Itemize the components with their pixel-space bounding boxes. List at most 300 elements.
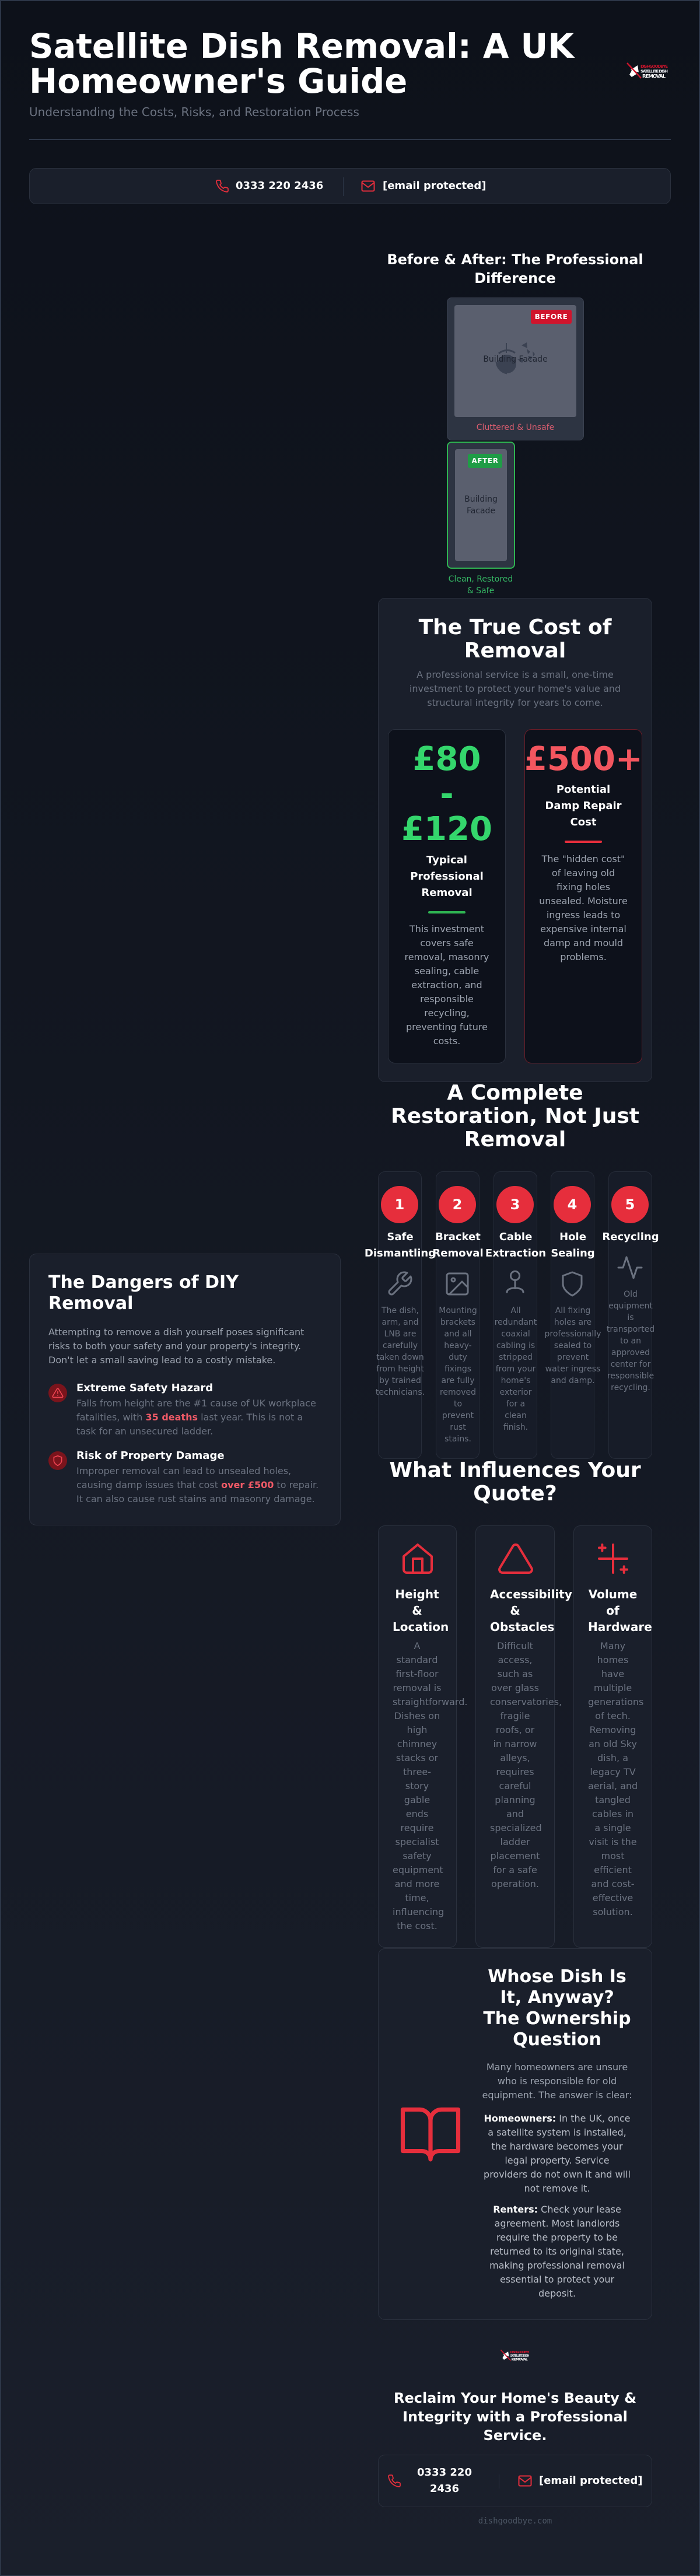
badge: after: AFTER bbox=[471, 457, 499, 465]
panel: dangers of DIY bbox=[29, 1254, 341, 1525]
logo: DISHGOODBYE bbox=[640, 64, 668, 69]
title bbox=[365, 1231, 436, 1259]
icon: cluttered dish bbox=[496, 342, 535, 374]
text: of tech. bbox=[595, 1710, 631, 1721]
label bbox=[464, 495, 498, 516]
description: taken down bbox=[376, 1353, 424, 1362]
body: recycling, bbox=[424, 1007, 470, 1019]
text: tangled bbox=[595, 1794, 631, 1805]
body: preventing future bbox=[406, 1021, 488, 1032]
text: and bbox=[506, 1808, 524, 1819]
description: brackets bbox=[440, 1318, 475, 1327]
title: Recycling bbox=[602, 1231, 659, 1243]
title bbox=[490, 1586, 540, 1635]
homeowners text bbox=[440, 2112, 674, 2196]
item text: It can also cause rust stains and masonry damage. bbox=[76, 1493, 315, 1504]
call to action heading: Integrity with a Professional bbox=[402, 2409, 628, 2425]
description: technicians. bbox=[376, 1388, 425, 1397]
text: for a safe bbox=[493, 1864, 537, 1875]
text: safety bbox=[402, 1850, 432, 1861]
number: 4 bbox=[568, 1196, 577, 1213]
homeowners text: legal property. Service bbox=[505, 2155, 610, 2166]
renters text: agreement. Most landlords bbox=[495, 2218, 620, 2229]
text: and cost- bbox=[591, 1878, 635, 1889]
homeowners text: a satellite system is installed, bbox=[488, 2127, 626, 2138]
description: investment to protect your home's value and bbox=[410, 683, 621, 694]
text: high bbox=[407, 1724, 427, 1735]
footer contact bar bbox=[378, 2455, 652, 2507]
icon: warning bbox=[48, 1384, 67, 1402]
description: clean bbox=[505, 1411, 527, 1420]
subtitle: Understanding the Costs, Risks, and Restoration Process bbox=[29, 105, 359, 119]
text: specialized bbox=[490, 1822, 542, 1833]
heading bbox=[440, 1966, 674, 2050]
icon: sparkle plus bbox=[594, 1540, 632, 1577]
label bbox=[545, 783, 622, 828]
renters text bbox=[440, 2203, 674, 2301]
title: & bbox=[412, 1604, 422, 1618]
title: Obstacles bbox=[490, 1620, 554, 1634]
description: Mounting bbox=[439, 1306, 477, 1315]
number bbox=[611, 1186, 649, 1223]
text: require bbox=[401, 1822, 433, 1833]
description: center for bbox=[611, 1360, 650, 1369]
body: fixing holes bbox=[556, 881, 610, 892]
heading: quote factors: What Influences Your bbox=[389, 1458, 641, 1482]
description: from height bbox=[376, 1364, 424, 1374]
description: from your bbox=[496, 1364, 536, 1374]
description: by trained bbox=[379, 1376, 421, 1385]
intro text: Many homeowners are unsure bbox=[487, 2062, 628, 2073]
text: gable bbox=[404, 1794, 430, 1805]
icon: phone bbox=[216, 180, 229, 192]
text: aerial, and bbox=[588, 1780, 638, 1791]
text: have bbox=[601, 1668, 624, 1679]
body: extraction, and bbox=[411, 979, 482, 991]
badge: after bbox=[468, 454, 502, 468]
title: of bbox=[606, 1604, 620, 1618]
icon: mail bbox=[362, 181, 374, 191]
description: duty bbox=[449, 1353, 467, 1362]
title: & bbox=[510, 1604, 520, 1618]
step 3 bbox=[494, 1171, 537, 1459]
item text bbox=[76, 1398, 316, 1437]
description: and all bbox=[444, 1329, 472, 1339]
heading: Removal bbox=[464, 639, 566, 663]
renters text: require the property to be bbox=[496, 2232, 618, 2243]
body: damp and mould bbox=[544, 937, 623, 949]
description: heavy- bbox=[444, 1341, 472, 1350]
description: is bbox=[627, 1313, 634, 1322]
icon: mail bbox=[518, 2475, 532, 2487]
description: Don't let a small saving lead to a costly mistake. bbox=[48, 1354, 275, 1366]
text: over glass bbox=[491, 1682, 539, 1693]
text: planning bbox=[495, 1794, 536, 1805]
icon: wrench bbox=[388, 1272, 412, 1295]
intro text: who is responsible for old bbox=[498, 2076, 617, 2087]
body bbox=[404, 923, 489, 1046]
description bbox=[376, 1306, 425, 1397]
description: stripped bbox=[499, 1353, 533, 1362]
title: Safe bbox=[387, 1231, 414, 1243]
item text bbox=[76, 1465, 318, 1504]
body: unsealed. Moisture bbox=[539, 895, 628, 907]
heading: complete restoration: Restoration, Not Just bbox=[391, 1104, 639, 1128]
text: Many bbox=[600, 1640, 625, 1651]
heading: quote factors bbox=[389, 1458, 641, 1506]
intro text: equipment. The answer is clear: bbox=[482, 2090, 632, 2101]
text: straightforward. bbox=[393, 1696, 467, 1707]
item text: fatalities, with 35 deaths last year. This is not a bbox=[76, 1412, 303, 1423]
text: Removing bbox=[590, 1724, 636, 1735]
divider bbox=[428, 911, 466, 914]
heading: before and after bbox=[387, 251, 643, 286]
heading: Question bbox=[513, 2029, 601, 2050]
description: transported bbox=[607, 1325, 654, 1334]
heading: before and after: Before & After: The Professional bbox=[387, 251, 643, 268]
badge: before bbox=[531, 310, 572, 324]
title: Removal bbox=[432, 1247, 484, 1259]
label: Typical bbox=[426, 854, 467, 866]
description: sealed to bbox=[554, 1341, 592, 1350]
number: 5 bbox=[625, 1196, 635, 1213]
homeowners text: Homeowners: In the UK, once bbox=[484, 2113, 631, 2124]
heading: complete restoration: A Complete bbox=[447, 1081, 583, 1105]
step 5 bbox=[608, 1171, 652, 1459]
call to action heading bbox=[378, 2389, 652, 2445]
text: Difficult bbox=[497, 1640, 533, 1651]
phone number: 2436 bbox=[430, 2483, 459, 2495]
text: requires bbox=[496, 1766, 534, 1777]
heading: quote factors: Quote? bbox=[473, 1482, 557, 1506]
item title: Risk of Property Damage bbox=[76, 1450, 225, 1462]
body: removal, masonry bbox=[404, 951, 489, 963]
text: equipment bbox=[393, 1864, 443, 1875]
panel: true cost bbox=[378, 598, 652, 1082]
call to action heading: Reclaim Your Home's Beauty & bbox=[394, 2390, 636, 2406]
text: Dishes on bbox=[394, 1710, 440, 1721]
text: first-floor bbox=[396, 1668, 439, 1679]
price: £80 bbox=[413, 740, 481, 778]
item text: Improper removal can lead to unsealed holes, bbox=[76, 1465, 291, 1476]
email: [email protected] bbox=[383, 180, 486, 192]
body: costs. bbox=[433, 1035, 460, 1046]
title: Location bbox=[393, 1620, 449, 1634]
text: access, bbox=[498, 1654, 532, 1665]
number bbox=[554, 1186, 591, 1223]
description bbox=[495, 1306, 537, 1432]
title: Height bbox=[395, 1587, 439, 1601]
card: professional bbox=[388, 729, 506, 1063]
icon: phone bbox=[387, 2474, 401, 2488]
body: of leaving old bbox=[552, 867, 615, 878]
text: fragile bbox=[501, 1710, 530, 1721]
description: carefully bbox=[383, 1341, 418, 1350]
logo: SATELLITE DISH bbox=[640, 69, 668, 74]
number bbox=[381, 1186, 418, 1223]
title: Hole bbox=[559, 1231, 586, 1243]
item text: Falls from height are the #1 cause of UK workplace bbox=[76, 1398, 316, 1409]
description: A professional service is a small, one-time bbox=[416, 669, 614, 680]
step 2 bbox=[436, 1171, 480, 1459]
description: LNB are bbox=[384, 1329, 416, 1339]
text: a single bbox=[594, 1822, 631, 1833]
text: in narrow bbox=[493, 1738, 537, 1749]
renters text: Renters: Check your lease bbox=[493, 2204, 621, 2215]
price: £500+ bbox=[524, 740, 643, 778]
title: Accessibility bbox=[490, 1587, 572, 1601]
description: Old bbox=[624, 1290, 638, 1299]
caption: after: Clean, Restored bbox=[449, 575, 513, 584]
label: Removal bbox=[421, 887, 473, 899]
description: home's bbox=[501, 1376, 530, 1385]
panel: after bbox=[447, 442, 515, 569]
text: specialist bbox=[396, 1836, 439, 1847]
icon: triangle bbox=[497, 1540, 534, 1577]
body: covers safe bbox=[420, 937, 474, 949]
phone number: 0333 220 bbox=[417, 2466, 472, 2479]
heading bbox=[48, 1272, 239, 1314]
text: an old Sky bbox=[589, 1738, 637, 1749]
description: risks to both your safety and your property's integrity. bbox=[48, 1340, 301, 1352]
homeowners text: not remove it. bbox=[524, 2183, 590, 2194]
email: [email protected] bbox=[539, 2474, 642, 2487]
label: Potential bbox=[556, 783, 610, 796]
text: effective bbox=[593, 1892, 633, 1903]
footer logo: DISHGOODBYE bbox=[510, 2351, 530, 2354]
text: influencing bbox=[393, 1906, 444, 1917]
number bbox=[496, 1186, 534, 1223]
panel: ownership bbox=[378, 1948, 652, 2320]
description: finish. bbox=[503, 1423, 528, 1432]
icon: cable anchor bbox=[506, 1270, 524, 1293]
call to action heading: Service. bbox=[484, 2427, 547, 2444]
text: and more bbox=[395, 1878, 439, 1889]
caption: after: & Safe bbox=[467, 586, 494, 596]
caption: Cluttered & Unsafe bbox=[477, 423, 554, 432]
icon: house bbox=[402, 1544, 433, 1574]
title bbox=[29, 27, 575, 101]
body: problems. bbox=[560, 951, 607, 963]
item title: Extreme Safety Hazard bbox=[76, 1382, 213, 1394]
description: All fixing bbox=[555, 1306, 590, 1315]
description: and damp. bbox=[551, 1376, 595, 1385]
text: time, bbox=[405, 1892, 429, 1903]
renters text: returned to its original state, bbox=[490, 2246, 624, 2257]
step 1 bbox=[378, 1171, 422, 1459]
homeowners text: the hardware becomes your bbox=[491, 2141, 623, 2152]
description bbox=[410, 669, 621, 708]
card: damp repair bbox=[524, 729, 642, 1063]
description: redundant bbox=[495, 1318, 537, 1327]
description: cabling is bbox=[496, 1341, 535, 1350]
text: standard bbox=[397, 1654, 438, 1665]
description bbox=[544, 1306, 601, 1385]
icon: activity bbox=[617, 1256, 643, 1279]
renters text: making professional removal bbox=[489, 2260, 625, 2271]
description: stains. bbox=[444, 1434, 471, 1444]
description: responsible bbox=[607, 1371, 654, 1381]
number: 3 bbox=[510, 1196, 520, 1213]
title bbox=[432, 1231, 484, 1259]
text: visit is the bbox=[589, 1836, 637, 1847]
description: prevent bbox=[557, 1353, 589, 1362]
heading: The Ownership bbox=[483, 2008, 631, 2029]
title: Extraction bbox=[485, 1247, 546, 1259]
text: homes bbox=[597, 1654, 628, 1665]
text: A bbox=[414, 1640, 420, 1651]
text bbox=[490, 1639, 540, 1891]
text: stacks or bbox=[396, 1752, 438, 1763]
description: are fully bbox=[442, 1376, 474, 1385]
heading: complete restoration bbox=[391, 1081, 639, 1152]
text: ladder bbox=[501, 1836, 530, 1847]
text: legacy TV bbox=[590, 1766, 636, 1777]
label: Professional bbox=[410, 870, 484, 883]
text: three- bbox=[403, 1766, 431, 1777]
header bbox=[29, 28, 671, 140]
footer website: dishgoodbye.com bbox=[478, 2516, 552, 2526]
text: most bbox=[601, 1850, 624, 1861]
before facade bbox=[454, 305, 576, 417]
description: The dish, bbox=[382, 1306, 419, 1315]
number: 1 bbox=[395, 1196, 404, 1213]
text: careful bbox=[499, 1780, 531, 1791]
factor: volume of hardware bbox=[573, 1525, 652, 1948]
description: arm, and bbox=[382, 1318, 418, 1327]
title: Sealing bbox=[551, 1247, 595, 1259]
title: Bracket bbox=[435, 1231, 481, 1243]
label: Damp Repair bbox=[545, 800, 622, 812]
badge: before: BEFORE bbox=[535, 313, 568, 321]
label: Building Facade bbox=[483, 355, 548, 364]
logo: REMOVAL bbox=[642, 74, 666, 79]
description bbox=[439, 1306, 477, 1444]
title bbox=[393, 1587, 449, 1634]
logo bbox=[626, 62, 668, 79]
text: cables in bbox=[592, 1808, 634, 1819]
title: Satellite Dish Removal: A UK bbox=[29, 27, 574, 66]
text: conservatories, bbox=[490, 1696, 562, 1707]
footer logo: REMOVAL bbox=[512, 2357, 528, 2361]
label bbox=[410, 854, 484, 899]
description: Attempting to remove a dish yourself poses significant bbox=[48, 1326, 304, 1338]
step 4 bbox=[551, 1171, 594, 1459]
item: safety hazard bbox=[48, 1382, 316, 1437]
text: story bbox=[405, 1780, 429, 1791]
item: property damage bbox=[48, 1450, 318, 1504]
price: - bbox=[440, 775, 454, 813]
icon: image bbox=[446, 1273, 469, 1295]
heading: before and after: Difference bbox=[474, 270, 556, 286]
text: efficient bbox=[594, 1864, 632, 1875]
description: equipment bbox=[608, 1301, 653, 1311]
body: This investment bbox=[410, 923, 484, 935]
heading: It, Anyway? bbox=[500, 1987, 614, 2008]
icon: shield bbox=[48, 1451, 67, 1470]
number: 2 bbox=[453, 1196, 462, 1213]
body: expensive internal bbox=[540, 923, 626, 935]
icon: shield bbox=[562, 1272, 582, 1296]
description: holes are bbox=[554, 1318, 592, 1327]
title bbox=[485, 1231, 546, 1259]
label: Facade bbox=[467, 506, 495, 516]
text: chimney bbox=[397, 1738, 437, 1749]
title: Homeowner's Guide bbox=[29, 62, 407, 101]
body bbox=[539, 853, 628, 963]
homeowners text: providers do not own it and will bbox=[484, 2169, 631, 2180]
body: ingress leads to bbox=[547, 909, 620, 921]
text: ends bbox=[406, 1808, 428, 1819]
title: Dismantling bbox=[365, 1247, 436, 1259]
after facade bbox=[455, 449, 507, 561]
divider bbox=[565, 841, 602, 843]
text: generations bbox=[588, 1696, 643, 1707]
description: to bbox=[454, 1399, 462, 1409]
contact bar bbox=[29, 168, 671, 204]
description: coaxial bbox=[501, 1329, 530, 1339]
title: Volume bbox=[589, 1587, 637, 1601]
text: placement bbox=[491, 1850, 540, 1861]
text: alleys, bbox=[500, 1752, 530, 1763]
body: responsible bbox=[420, 993, 474, 1005]
description: professionally bbox=[544, 1329, 601, 1339]
title: Cable bbox=[499, 1231, 532, 1243]
text: operation. bbox=[491, 1878, 539, 1889]
description bbox=[48, 1326, 304, 1366]
heading: The True Cost of bbox=[419, 615, 611, 639]
title bbox=[551, 1231, 595, 1259]
heading: complete restoration: Removal bbox=[464, 1128, 566, 1152]
factor: height and location bbox=[378, 1525, 457, 1948]
label: Building bbox=[464, 495, 498, 504]
phone number: 0333 220 2436 bbox=[236, 180, 323, 192]
footer logo bbox=[499, 2349, 531, 2361]
description: fixings bbox=[444, 1364, 471, 1374]
description bbox=[607, 1290, 654, 1392]
caption: after bbox=[449, 575, 513, 596]
heading bbox=[419, 615, 612, 663]
heading: Removal bbox=[48, 1293, 133, 1314]
title: Hardware bbox=[588, 1620, 652, 1634]
panel: before bbox=[447, 298, 584, 440]
text: multiple bbox=[594, 1682, 632, 1693]
description: removed bbox=[440, 1388, 476, 1397]
intro text bbox=[440, 2060, 674, 2102]
description: structural integrity for years to come. bbox=[427, 697, 603, 708]
text: such as bbox=[498, 1668, 533, 1679]
description: rust bbox=[450, 1423, 466, 1432]
description: to an bbox=[620, 1336, 641, 1346]
factor: accessibility bbox=[475, 1525, 555, 1948]
description: exterior bbox=[500, 1388, 531, 1397]
renters text: essential to protect your bbox=[500, 2274, 614, 2285]
phone number bbox=[386, 2465, 503, 2497]
heading: The Dangers of DIY bbox=[48, 1272, 239, 1293]
renters text: deposit. bbox=[538, 2288, 576, 2299]
description: All bbox=[510, 1306, 521, 1315]
icon: book bbox=[397, 2101, 464, 2168]
title bbox=[588, 1586, 638, 1635]
body: sealing, cable bbox=[415, 965, 479, 977]
heading: Whose Dish Is bbox=[488, 1966, 626, 1987]
text bbox=[588, 1639, 638, 1919]
price bbox=[401, 740, 492, 848]
number bbox=[439, 1186, 476, 1223]
description: for a bbox=[506, 1399, 525, 1409]
text bbox=[393, 1640, 467, 1931]
description: approved bbox=[611, 1348, 650, 1357]
